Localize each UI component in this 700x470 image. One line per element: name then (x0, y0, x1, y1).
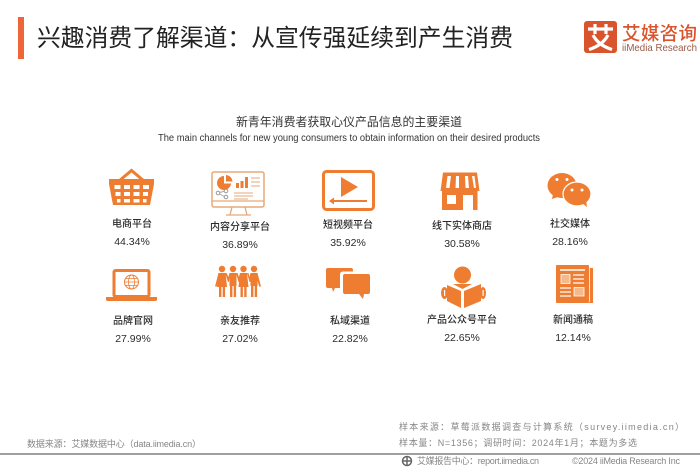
item: 社交媒体: 28.16% (552, 236, 588, 248)
item: 短视频平台: 35.92% (330, 237, 366, 249)
item: 电商平台 (109, 170, 154, 248)
footer: copyright: ©2024 iiMedia Research Inc (572, 456, 680, 466)
title: 兴趣消费了解渠道：从宣传强延续到产生消费 (37, 25, 513, 52)
item: 新闻通稿 (553, 265, 593, 344)
item: 产品公众号平台: 产品公众号平台 (427, 313, 497, 326)
sample notes: 样本来源：草莓派数据调查与计算系统（survey.iimedia.cn） (399, 421, 684, 432)
icon: globe (402, 456, 412, 466)
item: 短视频平台 (323, 172, 374, 249)
item: 内容分享平台: 内容分享平台 (210, 220, 270, 233)
item: 新闻通稿: 12.14% (555, 332, 591, 344)
item: 线下实体商店 (432, 172, 492, 250)
item: 产品公众号平台 (427, 266, 497, 344)
item: 社交媒体 (548, 173, 591, 248)
item: 线下实体商店: 线下实体商店 (432, 219, 492, 232)
item: 私域渠道: 22.82% (332, 333, 368, 345)
item: 亲友推荐: 亲友推荐 (220, 314, 260, 327)
item: 品牌官网: 品牌官网 (113, 314, 153, 327)
item: 亲友推荐: 27.02% (222, 333, 258, 345)
icon: chat bubbles (548, 173, 591, 207)
icon: video player (324, 172, 374, 210)
item: 短视频平台: 短视频平台 (323, 218, 373, 231)
item: 电商平台: 电商平台 (112, 217, 152, 230)
item: 电商平台: 44.34% (114, 236, 150, 248)
logo: iiMedia Research (584, 21, 697, 54)
item: 内容分享平台 (210, 172, 270, 251)
icon: person reading (441, 266, 486, 308)
chart heading: The main channels for new young consumers to obtain information on their desired products (158, 133, 540, 144)
item: 品牌官网: 27.99% (115, 333, 151, 345)
sample notes: 样本量：N=1356；调研时间：2024年1月；本题为多选 (399, 437, 637, 448)
item: 社交媒体: 社交媒体 (550, 217, 590, 230)
sample notes (399, 421, 684, 448)
item: 亲友推荐 (215, 266, 261, 345)
chart heading (158, 115, 540, 144)
item: 新闻通稿: 新闻通稿 (553, 313, 593, 326)
icon: laptop with globe (106, 270, 157, 301)
item: 内容分享平台: 36.89% (222, 239, 258, 251)
icon: monitor with charts (212, 172, 264, 215)
icon: shopping basket (109, 170, 154, 205)
title accent bar (18, 17, 24, 59)
icon: storefront (440, 172, 480, 210)
chart heading: 新青年消费者获取心仪产品信息的主要渠道 (236, 115, 462, 129)
item: 私域渠道: 私域渠道 (330, 314, 370, 327)
item: 品牌官网 (106, 270, 157, 345)
item: 线下实体商店: 30.58% (444, 238, 480, 250)
item: 产品公众号平台: 22.65% (444, 332, 480, 344)
icon: four people (215, 266, 261, 297)
item: 私域渠道 (326, 268, 370, 345)
footer rule (0, 453, 700, 455)
icon: newspaper (556, 265, 593, 303)
footer: report link: 艾媒报告中心：report.iimedia.cn (417, 455, 539, 466)
data source note: 数据来源：艾媒数据中心（data.iimedia.cn） (27, 438, 201, 449)
logo: iiMedia Research: 艾媒咨询 (622, 23, 697, 44)
icon: speech bubbles (326, 268, 370, 299)
